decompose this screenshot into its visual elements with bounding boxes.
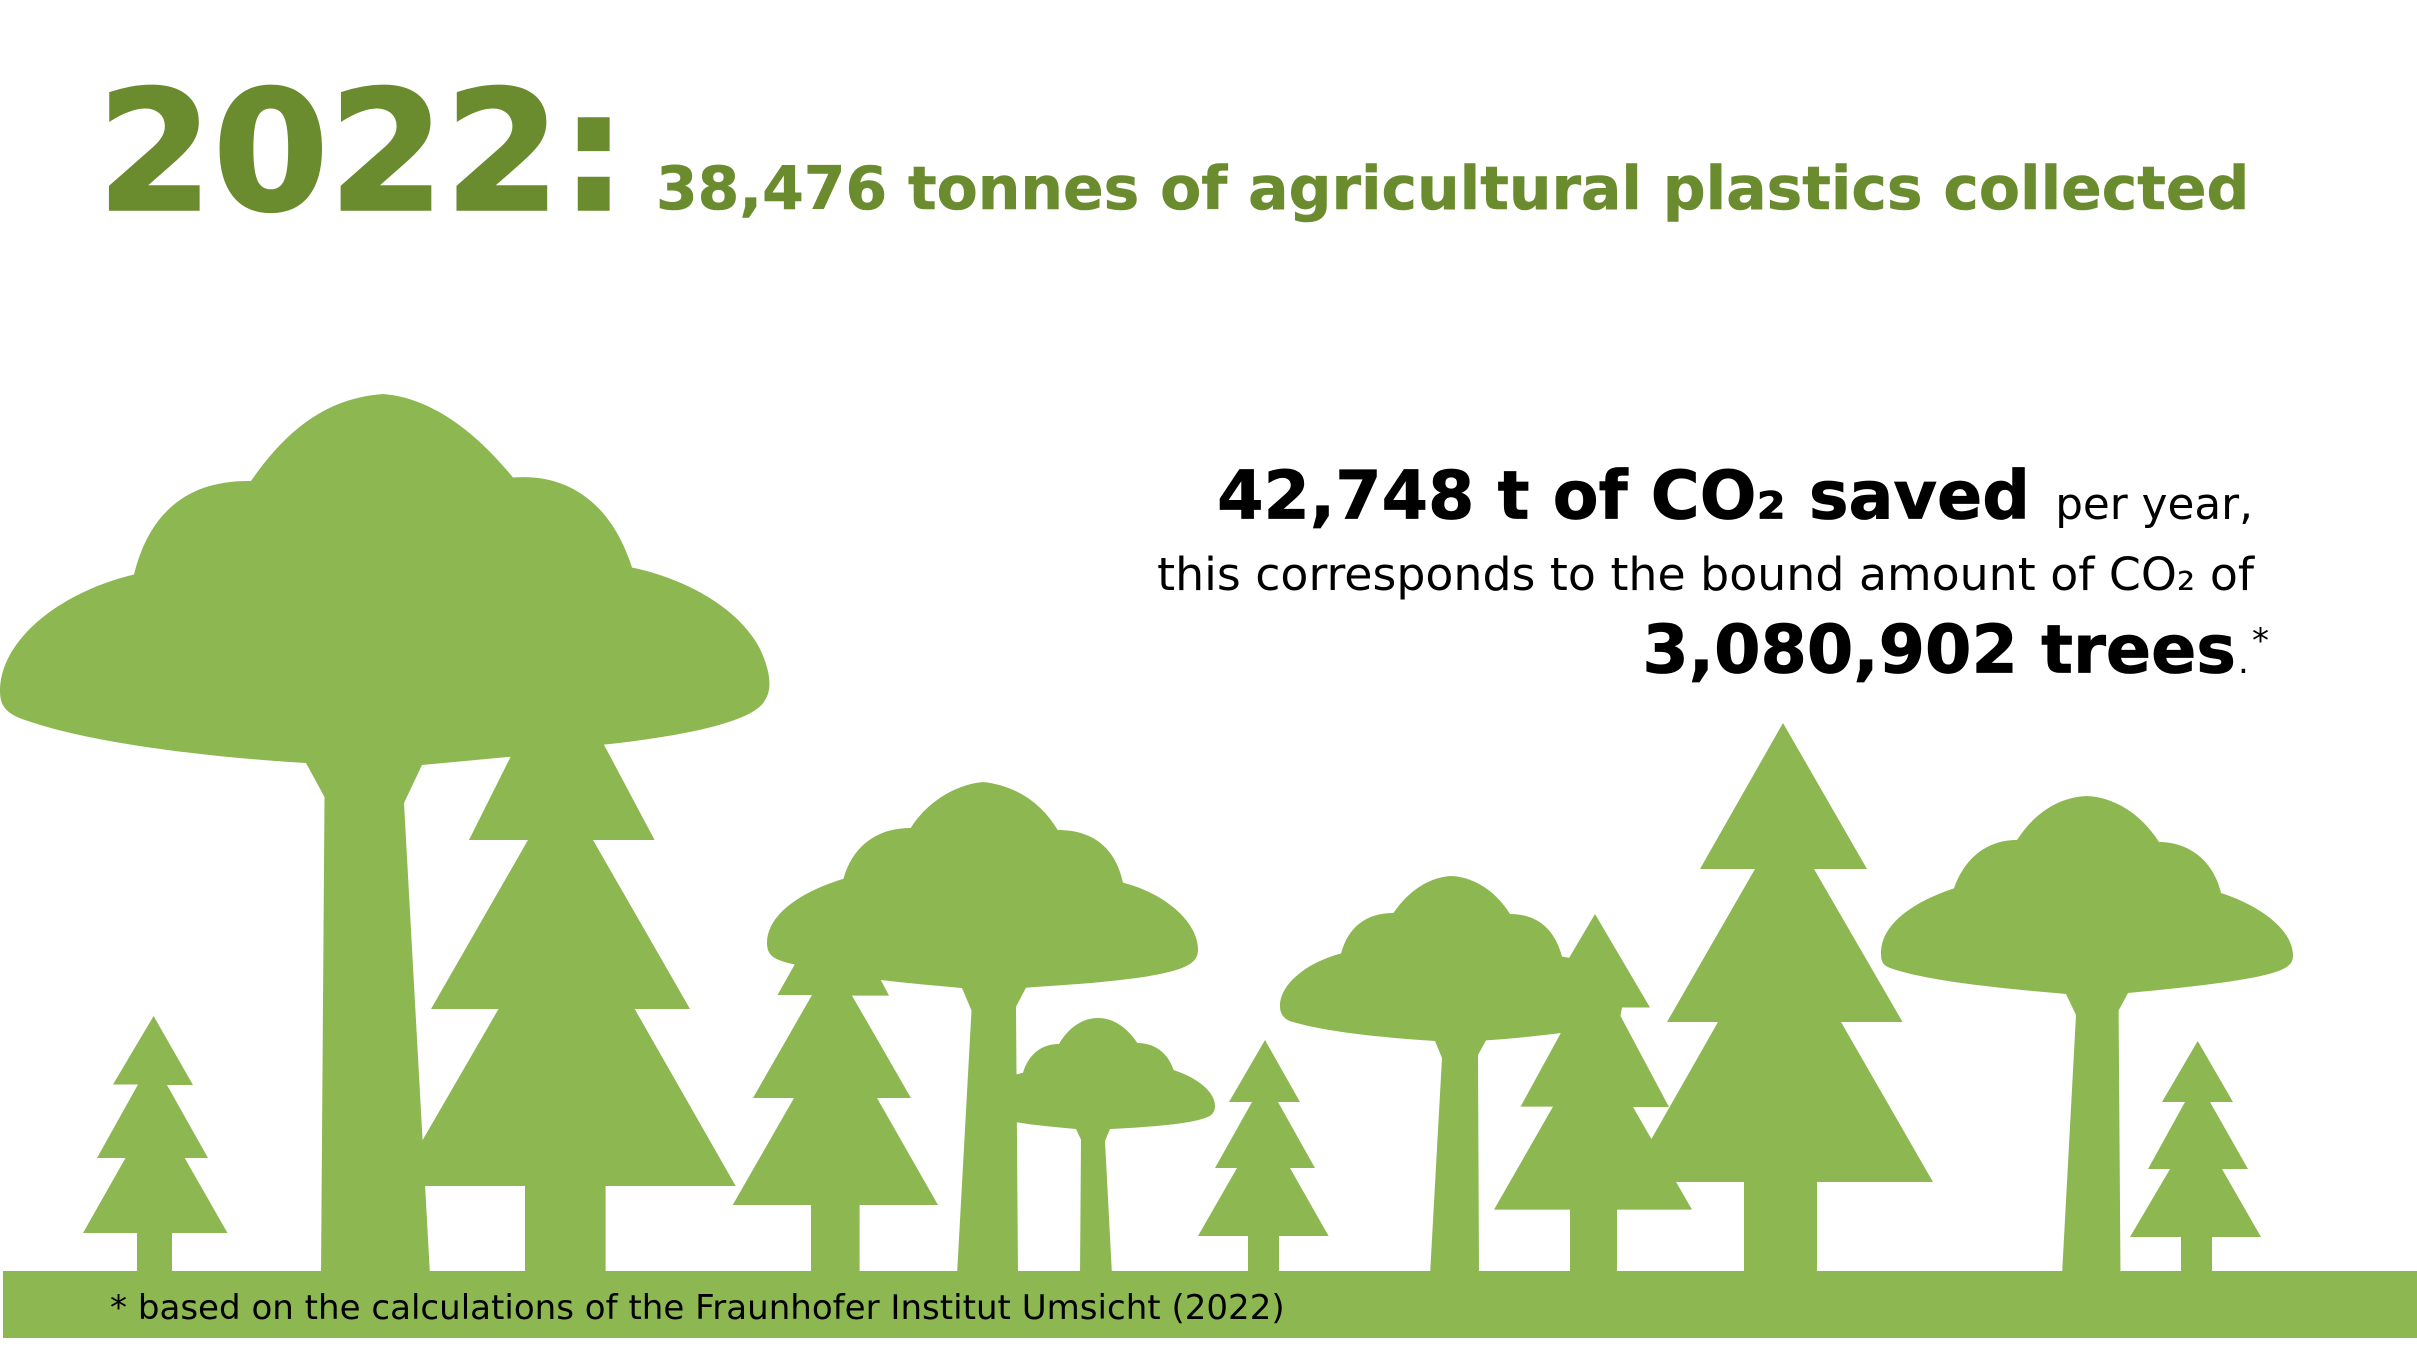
pine behind mushroom tree [733,893,938,1271]
period: . [2238,642,2249,682]
pine overlapping tall pine [1494,914,1692,1275]
trees amount: 3,080,902 trees [1642,610,2236,688]
footnote: * based on the calculations of the Fraunhofer Institut Umsicht (2022) [110,1288,1285,1328]
tall pine [1627,723,1933,1275]
small pine centre [1198,1040,1329,1275]
heading: tonnes collected: 38,476 tonnes of agricultural plastics collected [656,154,2249,224]
large pine [396,660,736,1275]
large mushroom tree [0,394,769,1275]
mushroom tree centre right [1280,876,1610,1275]
savings amount: 42,748 t of CO₂ saved [1217,456,2030,534]
ground [3,1271,2417,1338]
small mushroom tree [1010,1018,1215,1275]
heading: year: 2022: [97,56,627,250]
per year: per year, [2055,479,2253,530]
title [97,56,2249,250]
asterisk: * [2252,621,2269,661]
comparison line: this corresponds to the bound amount of CO₂ of [1157,547,2255,601]
forest illustration [0,394,2293,1275]
mushroom tree far right [1881,796,2293,1275]
small pine far right [2130,1041,2261,1275]
medium mushroom tree [767,782,1198,1275]
small pine far left [83,1016,228,1275]
CO2 savings statement [1157,456,2269,688]
